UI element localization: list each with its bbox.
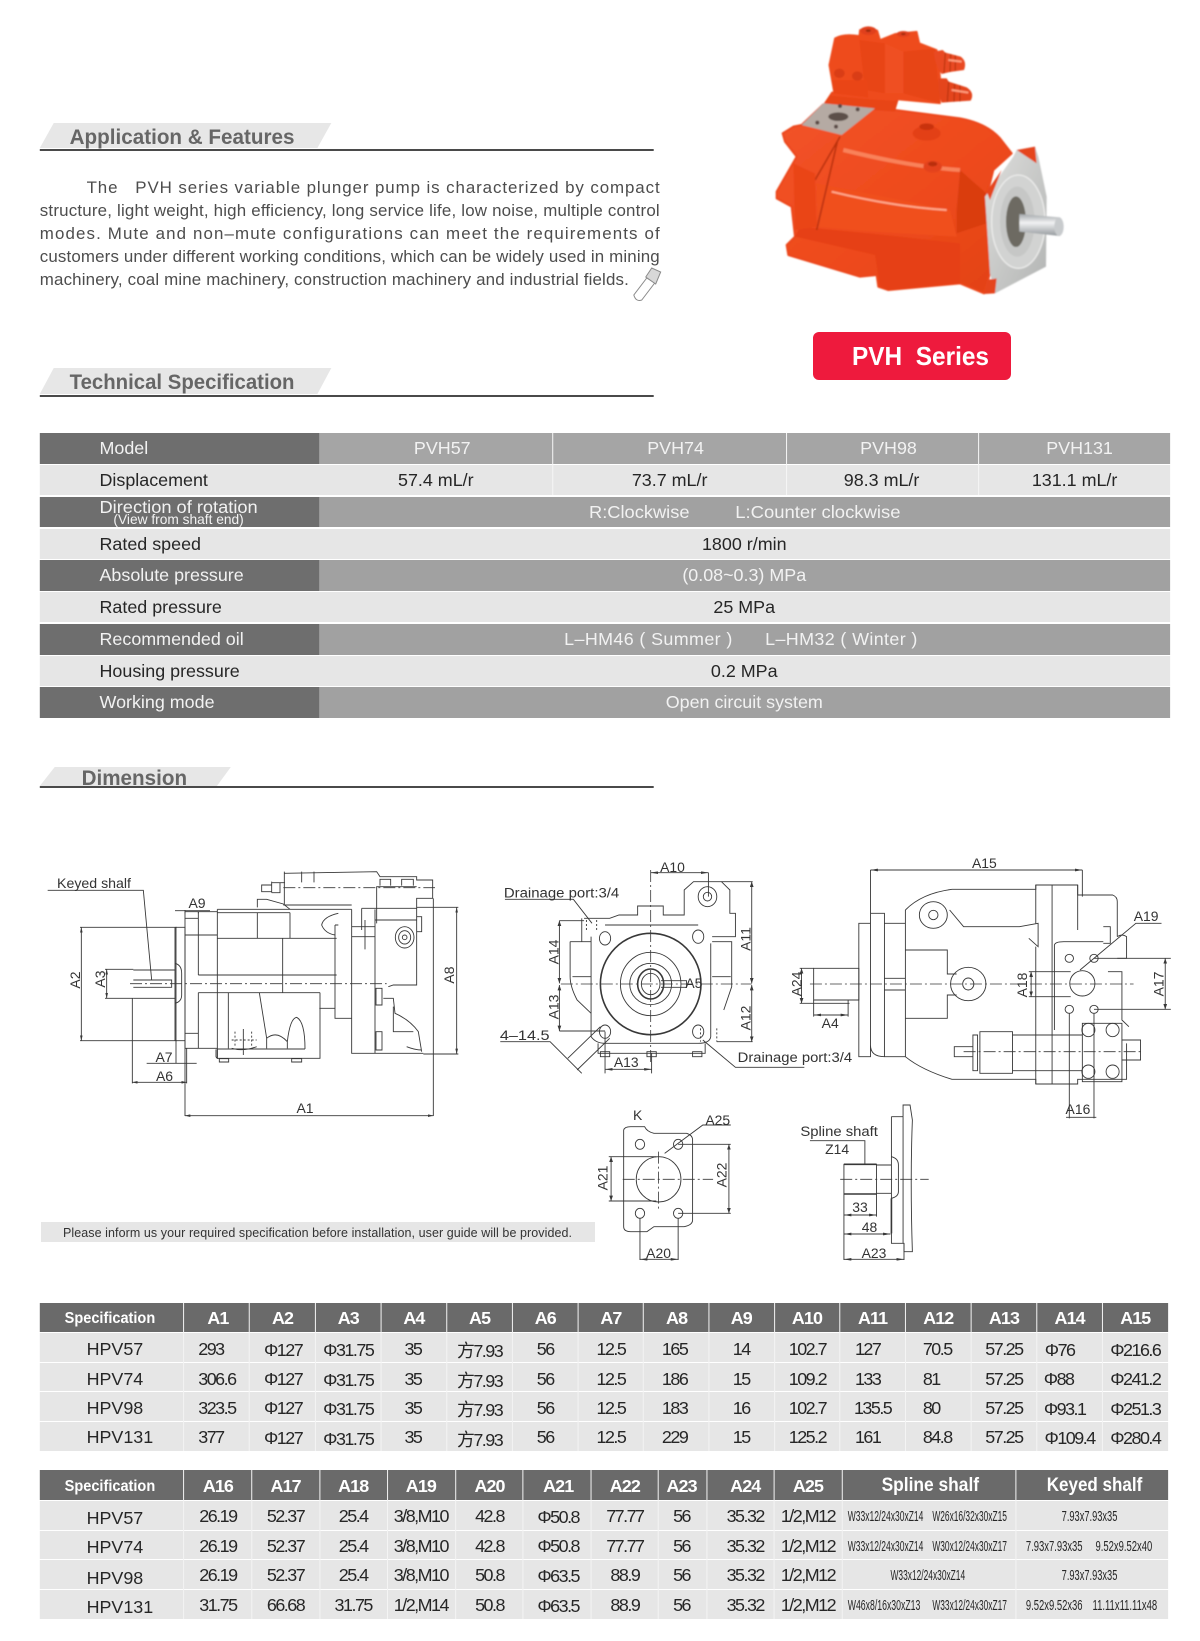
- row: Absolute pressure: Absolute pressure: [99, 565, 244, 585]
- row: HPV57: 3/8,M10: [394, 1506, 450, 1526]
- row: HPV98: 3/8,M10: [394, 1565, 450, 1585]
- drawing: rear view: [788, 855, 1171, 1118]
- row: HPV57: 165: [662, 1339, 689, 1359]
- table header row: A20: [474, 1476, 506, 1496]
- sub-part: upper nozzle: [934, 50, 965, 74]
- row: HPV98: Φ127: [264, 1398, 304, 1418]
- row: HPV57: 35.32: [727, 1506, 765, 1526]
- row: HPV98: W33x12/24x30xZ14: [891, 1567, 965, 1584]
- illustration: red PVH pump: [777, 26, 1064, 294]
- row: HPV98: [87, 1565, 1117, 1588]
- row: Working mode: Open circuit system: [666, 692, 823, 712]
- row: Absolute pressure: [99, 565, 806, 585]
- drawing: front view: 4–14.5: [500, 1027, 550, 1043]
- row: Recommended oil: L–HM46 ( Summer ): [564, 629, 732, 649]
- row: HPV98: 52.37: [267, 1565, 306, 1585]
- row: HPV57: 35: [404, 1339, 423, 1359]
- icon: small bolt: [634, 268, 661, 300]
- drawing: front view: [500, 859, 852, 1073]
- table header row: [65, 1308, 1151, 1328]
- row: HPV131: 66.68: [267, 1595, 306, 1615]
- row: HPV74: 3/8,M10: [394, 1536, 450, 1556]
- row: HPV98: 26.19: [199, 1565, 238, 1585]
- row: HPV131: [87, 1595, 1157, 1617]
- row: HPV74: 56: [673, 1536, 692, 1556]
- table: technical specification: [40, 432, 1170, 718]
- row: HPV98: 56: [673, 1565, 692, 1585]
- row: HPV98: 16: [733, 1398, 751, 1418]
- row: HPV74: 35.32: [727, 1536, 765, 1556]
- table header row: A13: [989, 1308, 1020, 1328]
- table header row: A10: [792, 1308, 823, 1328]
- row: HPV98: 35.32: [727, 1565, 765, 1585]
- row: HPV57: Φ127: [264, 1340, 304, 1360]
- drawing: front view: A13: [546, 994, 562, 1019]
- row: HPV98: HPV98: [87, 1568, 143, 1588]
- row: HPV57: 26.19: [199, 1506, 238, 1526]
- row: Displacement: 131.1 mL/r: [1032, 470, 1117, 490]
- heading: Application & Features: Application & Features: [70, 126, 295, 149]
- row: HPV57: W26x16/32x30xZ15: [932, 1508, 1007, 1525]
- text block: product description: [40, 178, 660, 289]
- row: Housing pressure: Housing pressure: [99, 661, 240, 681]
- drawing: spline shaft view: 48: [862, 1219, 877, 1235]
- row: HPV131: 12.5: [596, 1427, 627, 1447]
- table header row: A11: [858, 1308, 888, 1328]
- row: Rated speed: Rated speed: [99, 534, 201, 554]
- table: dimensions A16 to A25 and shafts: [40, 1470, 1168, 1619]
- notice: installation note: Please inform us your required specification before installation, user guide will be provided.: [63, 1226, 572, 1240]
- row: HPV98: 88.9: [610, 1565, 641, 1585]
- drawing: front view: A11: [738, 927, 754, 951]
- table header row: A17: [270, 1476, 302, 1496]
- row: HPV131: 15: [733, 1427, 751, 1447]
- drawing: port view K: K: [633, 1107, 643, 1123]
- text block: product description: The PVH series variable plunger pump is characterized by compact: [87, 178, 660, 197]
- notice: installation note: [41, 1222, 595, 1242]
- row: Direction of rotation: [99, 497, 900, 527]
- row: Displacement: 73.7 mL/r: [632, 470, 707, 490]
- table header row: A1: [207, 1308, 229, 1328]
- row: HPV131: 1/2,M12: [781, 1595, 837, 1615]
- row: HPV98: Φ31.75: [323, 1399, 375, 1419]
- row: HPV98: 80: [923, 1398, 941, 1418]
- row: HPV131: Φ31.75: [323, 1429, 375, 1449]
- row: HPV131: [87, 1427, 1162, 1450]
- drawing: side view with keyed shaft: A1: [296, 1100, 314, 1116]
- row: HPV74: 42.8: [475, 1536, 505, 1556]
- row: HPV98: 50.8: [475, 1565, 505, 1585]
- row: HPV98: 183: [662, 1398, 689, 1418]
- row: HPV74: Φ127: [264, 1369, 304, 1389]
- table header row: A24: [730, 1476, 761, 1496]
- table header row: A19: [406, 1476, 437, 1496]
- drawing: side view with keyed shaft: A6: [156, 1068, 173, 1084]
- row: HPV131: 377: [198, 1427, 225, 1447]
- row: Rated speed: [99, 534, 787, 554]
- row: Absolute pressure: (0.08~0.3) MPa: [682, 565, 806, 585]
- row: Model: PVH74: [647, 438, 704, 458]
- row: HPV57: Φ76: [1045, 1340, 1076, 1360]
- heading: Dimension: [40, 767, 654, 790]
- row: HPV131: Φ63.5: [537, 1596, 581, 1616]
- drawing: rear view: A19: [1134, 908, 1159, 924]
- row: HPV57: Φ31.75: [323, 1340, 375, 1360]
- row: HPV131: 11.11x11.11x48: [1093, 1597, 1157, 1614]
- row: HPV131: Φ109.4: [1045, 1428, 1096, 1448]
- table header row: A8: [666, 1308, 688, 1328]
- row: HPV98: [87, 1398, 1162, 1420]
- drawing: port view K: A21: [594, 1165, 610, 1190]
- row: HPV57: 52.37: [267, 1506, 306, 1526]
- row: HPV74: 57.25: [985, 1369, 1024, 1389]
- table header row: Specification: [65, 1478, 155, 1495]
- row: Displacement: 98.3 mL/r: [844, 470, 919, 490]
- drawing: side view with keyed shaft: A3: [92, 970, 108, 988]
- row: HPV74: W33x12/24x30xZ14: [848, 1538, 923, 1555]
- row: Rated pressure: 25 MPa: [713, 597, 775, 617]
- heading: Application & Features: [40, 123, 654, 151]
- drawing: side view with keyed shaft: A8: [441, 966, 457, 984]
- table header row: A12: [923, 1308, 954, 1328]
- row: Rated pressure: [99, 597, 775, 617]
- drawing: side view with keyed shaft: Keyed shalf: [57, 875, 131, 891]
- row: HPV131: 35.32: [727, 1595, 765, 1615]
- table header row: A2: [272, 1308, 294, 1328]
- row: HPV98: 102.7: [789, 1398, 828, 1418]
- row: HPV57: 7.93x7.93x35: [1062, 1508, 1117, 1525]
- row: Working mode: Working mode: [99, 692, 215, 712]
- table header row: A23: [667, 1476, 698, 1496]
- row: HPV131: HPV131: [87, 1427, 153, 1447]
- table: dimensions A1 to A15: [40, 1303, 1168, 1451]
- drawing: side view with keyed shaft: A9: [188, 895, 206, 911]
- row: HPV57: 56: [537, 1339, 555, 1359]
- row: HPV74: 35: [404, 1369, 423, 1389]
- row: HPV131: 84.8: [923, 1427, 953, 1447]
- table header row: A21: [543, 1476, 574, 1496]
- row: HPV98: 方7.93: [457, 1400, 504, 1420]
- drawing: front view: Drainage port:3/4: [504, 884, 619, 901]
- row: HPV131: 35: [404, 1427, 423, 1447]
- row: Model: PVH131: [1046, 438, 1113, 458]
- drawing: rear view: A24: [788, 971, 804, 996]
- drawing: spline shaft view: [800, 1105, 929, 1261]
- row: Model: Model: [99, 438, 148, 458]
- row: Working mode: [99, 692, 823, 712]
- row: HPV131: 31.75: [335, 1595, 373, 1615]
- row: Direction of rotation: R:Clockwise: [589, 502, 690, 522]
- row: Direction of rotation: L:Counter clockwise: [735, 502, 900, 522]
- table header row: A14: [1055, 1308, 1086, 1328]
- row: HPV98: 135.5: [854, 1398, 893, 1418]
- row: HPV74: [87, 1369, 1162, 1391]
- drawing: rear view: A15: [972, 855, 997, 871]
- text block: product description: structure, light weight, high efficiency, long service life, low noise, multiple control: [40, 201, 660, 220]
- row: HPV98: Φ63.5: [537, 1566, 581, 1586]
- badge: PVH Series: PVH Series: [852, 341, 989, 371]
- row: Housing pressure: [99, 661, 778, 681]
- row: Displacement: Displacement: [99, 470, 208, 490]
- drawing: front view: Drainage port:3/4: [738, 1049, 852, 1065]
- table header row: A16: [203, 1476, 234, 1496]
- row: HPV131: 50.8: [475, 1595, 505, 1615]
- row: HPV131: 1/2,M14: [394, 1595, 450, 1615]
- row: HPV131: Φ127: [264, 1428, 304, 1448]
- row: HPV74: 1/2,M12: [781, 1536, 837, 1556]
- drawing: rear view: A17: [1151, 971, 1167, 996]
- row: HPV57: 14: [733, 1339, 751, 1359]
- heading: Technical Specification: Technical Specification: [70, 371, 295, 394]
- row: HPV131: 56: [673, 1595, 692, 1615]
- row: HPV98: Φ93.1: [1044, 1399, 1087, 1419]
- row: HPV57: Φ216.6: [1110, 1340, 1162, 1360]
- row: HPV57: HPV57: [87, 1508, 143, 1528]
- row: HPV131: 31.75: [199, 1595, 238, 1615]
- drawing: spline shaft view: A23: [862, 1245, 887, 1261]
- row: HPV57: 102.7: [789, 1339, 828, 1359]
- row: HPV131: 57.25: [985, 1427, 1024, 1447]
- drawing: front view: A13: [614, 1054, 639, 1070]
- row: HPV98: 56: [537, 1398, 555, 1418]
- row: HPV74: 26.19: [199, 1536, 238, 1556]
- row: HPV57: 方7.93: [457, 1341, 504, 1361]
- row: Displacement: 57.4 mL/r: [398, 470, 474, 490]
- row: HPV74: Φ31.75: [323, 1370, 375, 1390]
- row: HPV57: 1/2,M12: [781, 1506, 837, 1526]
- text block: product description: customers under different working conditions, which can be widely used in mining: [40, 247, 660, 266]
- row: HPV57: [87, 1339, 1162, 1361]
- table header row: A25: [793, 1476, 824, 1496]
- row: HPV131: 125.2: [789, 1427, 828, 1447]
- row: Model: [99, 438, 1113, 458]
- row: HPV131: Φ280.4: [1110, 1428, 1162, 1448]
- table header row: Specification: [65, 1310, 155, 1327]
- row: HPV57: 127: [855, 1339, 882, 1359]
- drawing: port view K: [594, 1107, 731, 1261]
- drawing: spline shaft view: 33: [852, 1199, 868, 1215]
- row: HPV74: 9.52x9.52x40: [1095, 1538, 1152, 1555]
- row: HPV98: 57.25: [985, 1398, 1024, 1418]
- row: HPV74: 81: [923, 1369, 941, 1389]
- text block: product description: machinery, coal mine machinery, construction machinery and industrial fields.: [40, 270, 629, 289]
- drawing: side view with keyed shaft: [48, 872, 458, 1116]
- drawing: front view: A10: [660, 859, 685, 875]
- row: HPV131: HPV131: [87, 1597, 153, 1617]
- heading: Technical Specification: [40, 368, 654, 397]
- row: HPV74: 56: [537, 1369, 555, 1389]
- drawing: rear view: A16: [1066, 1101, 1091, 1117]
- drawing: rear view: A4: [822, 1015, 839, 1031]
- row: HPV74: HPV74: [87, 1369, 143, 1389]
- row: HPV131: 方7.93: [457, 1430, 504, 1450]
- row: HPV74: W30x12/24x30xZ17: [932, 1538, 1007, 1555]
- table header row: A6: [535, 1308, 557, 1328]
- badge: PVH Series: [813, 332, 1011, 380]
- row: HPV74: Φ88: [1044, 1369, 1075, 1389]
- drawing: front view: A5: [685, 975, 703, 991]
- heading: Dimension: Dimension: [82, 767, 187, 790]
- row: Direction of rotation: (View from shaft end): [113, 512, 244, 527]
- table header row: A9: [731, 1308, 753, 1328]
- table header row: A22: [610, 1476, 641, 1496]
- row: Rated speed: 1800 r/min: [702, 534, 787, 554]
- row: HPV131: 56: [537, 1427, 555, 1447]
- row: HPV57: 57.25: [985, 1339, 1024, 1359]
- row: HPV98: 323.5: [198, 1398, 237, 1418]
- row: HPV74: 方7.93: [457, 1371, 504, 1391]
- table header row: [65, 1475, 1143, 1496]
- row: HPV74: 12.5: [596, 1369, 627, 1389]
- row: HPV74: Φ241.2: [1110, 1369, 1162, 1389]
- row: HPV74: 7.93x7.93x35: [1026, 1538, 1083, 1555]
- drawing: spline shaft view: Z14: [825, 1141, 849, 1157]
- row: HPV98: Φ251.3: [1110, 1399, 1162, 1419]
- row: HPV74: 52.37: [267, 1536, 306, 1556]
- drawing: port view K: A22: [714, 1162, 730, 1187]
- drawing: side view with keyed shaft: A7: [155, 1049, 173, 1065]
- table header row: A3: [338, 1308, 360, 1328]
- row: HPV74: 25.4: [339, 1536, 369, 1556]
- table header row: A7: [600, 1308, 622, 1328]
- row: HPV74: 109.2: [789, 1369, 828, 1389]
- table header row: Spline shalf: [882, 1475, 980, 1496]
- row: HPV57: 42.8: [475, 1506, 505, 1526]
- row: Direction of rotation: Direction of rotation: [99, 497, 258, 517]
- row: HPV57: HPV57: [87, 1339, 143, 1359]
- row: Recommended oil: L–HM32 ( Winter ): [765, 629, 917, 649]
- text block: product description: modes. Mute and non–mute configurations can meet the requirements of: [40, 224, 660, 243]
- row: Housing pressure: 0.2 MPa: [711, 661, 778, 681]
- row: HPV57: 70.5: [923, 1339, 953, 1359]
- row: HPV131: 229: [662, 1427, 689, 1447]
- row: HPV57: 12.5: [596, 1339, 627, 1359]
- drawing: port view K: A20: [646, 1245, 671, 1261]
- row: HPV57: W33x12/24x30xZ14: [848, 1508, 923, 1525]
- row: HPV98: HPV98: [87, 1398, 143, 1418]
- table header row: A18: [338, 1476, 369, 1496]
- table header row: A5: [469, 1308, 491, 1328]
- drawing: side view with keyed shaft: A2: [67, 971, 83, 989]
- row: HPV57: 293: [198, 1339, 225, 1359]
- row: HPV57: Φ50.8: [537, 1507, 581, 1527]
- row: Displacement: [99, 470, 1117, 490]
- row: HPV74: 186: [662, 1369, 689, 1389]
- row: Recommended oil: [99, 629, 917, 649]
- row: Recommended oil: Recommended oil: [99, 629, 244, 649]
- row: HPV57: 77.77: [606, 1506, 645, 1526]
- row: HPV74: 15: [733, 1369, 751, 1389]
- table header row: A15: [1120, 1308, 1151, 1328]
- row: HPV131: W33x12/24x30xZ17: [932, 1597, 1007, 1614]
- row: HPV57: 56: [673, 1506, 692, 1526]
- row: HPV74: 77.77: [606, 1536, 645, 1556]
- row: HPV131: W46x8/16x30xZ13: [848, 1597, 920, 1614]
- row: HPV74: 133: [855, 1369, 882, 1389]
- row: HPV74: 306.6: [198, 1369, 237, 1389]
- row: HPV131: 161: [855, 1427, 882, 1447]
- row: HPV131: 88.9: [610, 1595, 641, 1615]
- row: HPV98: 1/2,M12: [781, 1565, 837, 1585]
- row: Model: PVH98: [860, 438, 917, 458]
- table header row: Keyed shalf: [1047, 1475, 1143, 1496]
- drawing: spline shaft view: Spline shaft: [800, 1123, 878, 1139]
- drawing: port view K: A25: [705, 1112, 730, 1128]
- drawing: front view: A14: [546, 939, 562, 964]
- row: HPV131: 9.52x9.52x36: [1026, 1597, 1083, 1614]
- row: HPV57: 25.4: [339, 1506, 369, 1526]
- row: HPV57: [87, 1506, 1117, 1528]
- drawing: front view: A12: [738, 1005, 754, 1030]
- drawing: rear view: A18: [1014, 972, 1030, 997]
- row: HPV98: 35: [404, 1398, 423, 1418]
- row: HPV74: Φ50.8: [537, 1536, 581, 1556]
- row: HPV98: 7.93x7.93x35: [1062, 1567, 1117, 1584]
- row: Model: PVH57: [414, 438, 471, 458]
- table header row: A4: [403, 1308, 425, 1328]
- row: HPV98: 25.4: [339, 1565, 369, 1585]
- sub-part: lower nozzle: [938, 78, 972, 103]
- row: HPV74: [87, 1536, 1152, 1557]
- row: Rated pressure: Rated pressure: [99, 597, 222, 617]
- row: HPV98: 12.5: [596, 1398, 627, 1418]
- row: HPV74: HPV74: [87, 1537, 143, 1557]
